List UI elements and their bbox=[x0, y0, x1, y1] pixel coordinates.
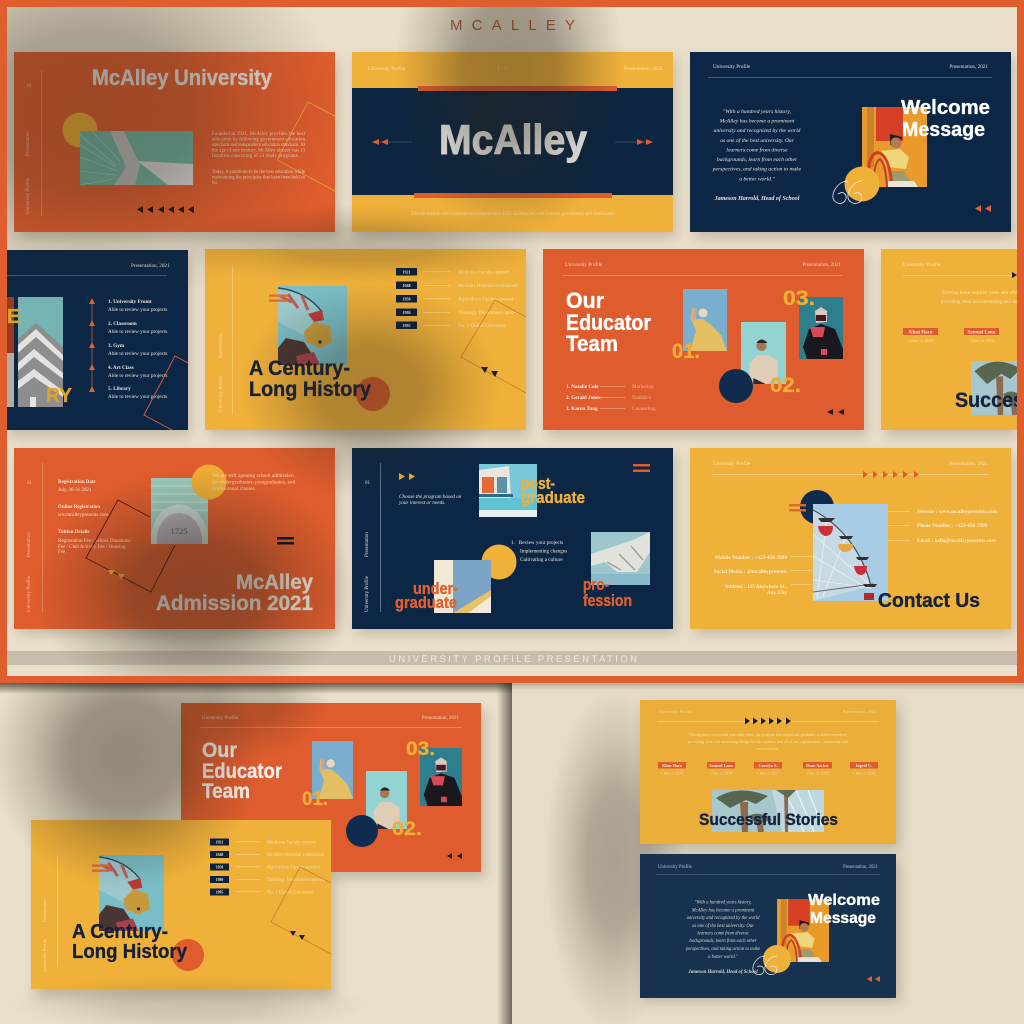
name tags: Ingrid C. bbox=[856, 763, 872, 768]
name tags bbox=[903, 328, 999, 343]
heading: Team bbox=[202, 780, 250, 803]
outline shape bbox=[271, 867, 331, 954]
list: 1. University Fromt bbox=[108, 299, 152, 305]
sidebar text: Presentation bbox=[365, 532, 370, 557]
contact details left: Mobile Number : +123-456-7899 bbox=[715, 555, 787, 561]
list: 5. Library bbox=[108, 386, 131, 392]
timeline dates: 1921 bbox=[216, 840, 223, 844]
list: Able to review your projects bbox=[108, 394, 167, 400]
contact details left: Address : 123 Anywhere St., bbox=[725, 584, 788, 590]
slide: Successful Stories (cut) bbox=[881, 249, 1024, 430]
details: July, 26-31 2021 bbox=[58, 488, 92, 493]
profession bbox=[583, 575, 632, 610]
numbers: 01. bbox=[672, 340, 700, 363]
timeline dates: McAlley Hospital established bbox=[458, 284, 518, 289]
paragraph: standards and independent education standards. At bbox=[212, 143, 306, 148]
arrows right bbox=[615, 139, 653, 145]
details: Online Registration bbox=[58, 505, 100, 510]
quote: learners come from diverse bbox=[726, 146, 788, 154]
list: 4. Art Class bbox=[108, 365, 134, 371]
heading: McAlley bbox=[439, 116, 588, 163]
team list: Statistics bbox=[632, 395, 651, 401]
quote: a better world." bbox=[739, 176, 775, 182]
timeline dates: Theology Department opened bbox=[267, 878, 325, 883]
heading: Welcome bbox=[808, 892, 880, 909]
heading bbox=[249, 357, 371, 401]
header bbox=[659, 709, 878, 715]
intro text: your interest or needs. bbox=[398, 500, 446, 506]
timeline dates: 1980 bbox=[402, 310, 410, 315]
contact details right: Website : www.mcalleypresents.com bbox=[917, 509, 998, 515]
card shadows bbox=[35, 710, 485, 997]
bars bbox=[92, 864, 110, 872]
slide: A Century-Long History copy bbox=[31, 820, 331, 989]
sidebar text: 01 bbox=[27, 84, 32, 89]
timeline dates: Agriculture Faculty opened bbox=[267, 866, 320, 870]
photo: man on chair bbox=[777, 899, 829, 962]
slide: Welcome Message copy bbox=[640, 854, 896, 998]
text bbox=[941, 291, 1024, 305]
header: Presentation, 2021 bbox=[843, 865, 879, 870]
name tags: Khaz Haro bbox=[909, 330, 933, 336]
timeline dates: 1980 bbox=[216, 878, 223, 882]
sidebar text bbox=[219, 333, 224, 412]
sidebar text: University Profile bbox=[219, 375, 224, 412]
header: Presentation, 2021 bbox=[131, 263, 170, 269]
header: Presentation, 2021 bbox=[949, 64, 988, 70]
slide: McAlley Admission 2021 bbox=[14, 448, 335, 629]
name tags: Class of 2015 bbox=[661, 770, 683, 776]
strip caption: UNIVERSITY PROFILE PRESENTATION bbox=[389, 654, 637, 665]
profession: fession bbox=[583, 591, 632, 610]
paragraph: the age of one century, McAlley already has 13 bbox=[212, 148, 306, 154]
timeline dates: No. 1 Global University bbox=[267, 890, 314, 896]
timeline bbox=[89, 298, 95, 392]
post-graduate: post- bbox=[521, 474, 555, 493]
slide: facilities (cut) bbox=[7, 250, 188, 430]
list: Implementing changes bbox=[520, 548, 567, 554]
sidebar text bbox=[42, 899, 47, 972]
heading bbox=[901, 97, 990, 141]
quote marks bbox=[753, 956, 777, 975]
quote: university and recognized by the world bbox=[687, 916, 760, 921]
numbers bbox=[672, 287, 815, 397]
equal bars bbox=[277, 537, 294, 544]
arrows bbox=[867, 976, 880, 982]
quote: university and recognized by the world bbox=[714, 128, 801, 134]
photo stack bbox=[7, 297, 63, 407]
paragraph: education by following government education bbox=[212, 138, 306, 142]
top title: MCALLEY bbox=[450, 17, 575, 34]
team list bbox=[566, 384, 656, 412]
team list: Marketing bbox=[632, 384, 654, 390]
team list: 1. Natalie Cole bbox=[566, 384, 599, 390]
quote: Jameson Harrold, Head of School bbox=[714, 196, 800, 202]
timeline dates: 1921 bbox=[402, 270, 410, 274]
timeline dates bbox=[396, 268, 518, 329]
slide: programs bbox=[352, 448, 673, 629]
panel: lower right bbox=[512, 683, 1024, 1024]
arrows bbox=[745, 718, 791, 724]
details: ww.mcalleypresents.com bbox=[58, 513, 108, 518]
name tags: Class of 2017 bbox=[757, 770, 779, 776]
intro text: Driving these successful years into effect, the program has shaped our graduates to lead everywhere bbox=[689, 732, 847, 738]
timeline dates: McAlley Hospital established bbox=[267, 853, 325, 858]
header: Presentation, 2021 bbox=[949, 461, 988, 467]
quote: Jameson Harrold, Head of School bbox=[687, 970, 758, 975]
name tags bbox=[658, 762, 878, 776]
quote: backgrounds, learn from each other bbox=[717, 156, 798, 163]
heading bbox=[72, 921, 188, 963]
heading: Long History bbox=[72, 941, 188, 963]
heading: A Century- bbox=[249, 357, 350, 380]
heading: McAlley University bbox=[92, 65, 273, 90]
sidebar text: University Profile bbox=[42, 939, 47, 972]
list: Able to review your projects bbox=[108, 351, 167, 357]
numbers: 02. bbox=[770, 374, 801, 397]
quote: perspectives, and taking action to make bbox=[712, 166, 802, 172]
photo: wheel bbox=[99, 855, 164, 931]
circle bbox=[346, 815, 378, 847]
circle bbox=[482, 544, 516, 580]
slide: Contact Us bbox=[690, 448, 1011, 629]
connectors bbox=[790, 511, 910, 585]
header: University Profile bbox=[565, 261, 603, 268]
outline shape bbox=[144, 356, 188, 430]
header: University Profile bbox=[903, 261, 941, 268]
outline shape bbox=[461, 300, 526, 393]
heading bbox=[156, 571, 313, 615]
sidebar text: Presentation bbox=[219, 333, 224, 358]
heading: McAlley bbox=[236, 571, 313, 594]
quote: "With a hundred years history, bbox=[723, 109, 792, 115]
list: Able to review your projects bbox=[108, 373, 167, 379]
sidebar text: University Profile bbox=[27, 575, 32, 612]
intro text bbox=[398, 494, 462, 506]
sidebar text: Presentation bbox=[26, 131, 31, 156]
timeline dates: 1958 bbox=[402, 296, 410, 302]
under-graduate: graduate bbox=[395, 593, 457, 612]
team list: Counseling bbox=[632, 406, 656, 412]
subtitle: Educate students who contribute and progress since 1921. Building ties with business, government, and beneficiaries bbox=[411, 212, 615, 217]
outline shape bbox=[277, 102, 335, 191]
heading: Successful Stories bbox=[699, 811, 838, 829]
sidebar text: Presentation bbox=[27, 532, 32, 557]
contact details right: Email : hello@mcalleypresents.com bbox=[917, 538, 997, 544]
slide: Successful Stories bbox=[640, 700, 896, 844]
arrows bbox=[481, 367, 498, 377]
timeline dates: Medicine Faculty opened bbox=[458, 270, 509, 276]
quote: McAlley has become a prominent bbox=[691, 908, 755, 914]
circle bbox=[356, 377, 390, 411]
card shadows bbox=[7, 58, 1017, 634]
timeline dates: No. 1 Global University bbox=[458, 324, 507, 329]
timeline dates: 1958 bbox=[216, 866, 223, 870]
circle bbox=[172, 939, 204, 971]
header text bbox=[368, 66, 662, 71]
heading: Long History bbox=[249, 378, 371, 401]
vertical rule bbox=[41, 70, 42, 216]
yellow letters bbox=[7, 306, 73, 407]
details bbox=[58, 480, 131, 555]
header: Presentation, 2021 bbox=[843, 709, 878, 715]
paragraph: Founded in 1921, McAlley provides the best bbox=[212, 132, 306, 137]
list: 3. Gym bbox=[108, 343, 125, 349]
arrows bbox=[975, 205, 991, 212]
header bbox=[565, 261, 841, 268]
photo: arch bbox=[151, 478, 208, 544]
arrows bbox=[137, 206, 194, 213]
post-graduate: graduate bbox=[521, 488, 585, 507]
timeline dates: Medicine Faculty opened bbox=[267, 840, 316, 846]
bars bbox=[789, 504, 806, 512]
slide: A Century-Long History bbox=[205, 249, 526, 430]
numbers: 02. bbox=[392, 819, 422, 840]
paragraph: We are still opening school admission bbox=[212, 473, 294, 479]
quote: a better world." bbox=[708, 955, 738, 960]
photo: beach house bbox=[479, 464, 537, 517]
panel: lower left bbox=[0, 620, 512, 1024]
slide: McAlley University bbox=[14, 52, 335, 232]
quote: as one of the best university. Our bbox=[692, 924, 754, 929]
details: Fee / Club Activity Fee / Housing bbox=[58, 545, 126, 550]
sidebar text: 01 bbox=[365, 481, 370, 486]
paragraph: far. bbox=[212, 181, 218, 186]
card shadows bbox=[644, 705, 900, 1002]
top cast shadow bbox=[512, 683, 1024, 690]
heading: Message bbox=[902, 119, 985, 141]
shading overlay bbox=[0, 620, 370, 1024]
quote: perspectives, and taking action to make bbox=[685, 947, 760, 952]
intro text bbox=[688, 732, 849, 751]
details: Tuition Details bbox=[58, 530, 89, 535]
header: Presentation, 2021 bbox=[802, 262, 841, 268]
sidebar text: 01 bbox=[27, 481, 32, 486]
name tags: Class of 2016 bbox=[969, 338, 995, 343]
sidebar text: Presentation bbox=[42, 899, 47, 922]
arrows bbox=[827, 409, 844, 415]
arrows bbox=[399, 473, 415, 480]
sidebar text bbox=[365, 481, 370, 612]
quote bbox=[685, 900, 760, 975]
numbers: 03. bbox=[406, 739, 435, 760]
list bbox=[511, 540, 567, 563]
slide: Our Educator Team bbox=[543, 249, 864, 430]
name tags: Class of 2015 bbox=[908, 338, 934, 343]
bars bbox=[633, 464, 650, 472]
details: Registration Fee / School Donations bbox=[58, 539, 131, 544]
name tags: Class of 2019 bbox=[853, 770, 875, 776]
details: Registration Date bbox=[58, 480, 96, 485]
quote: learners come from diverse bbox=[697, 932, 749, 936]
timeline dates: 1948 bbox=[402, 283, 410, 288]
bottom strip bbox=[7, 651, 1017, 665]
slide: Welcome Message bbox=[690, 52, 1011, 232]
paragraph: for undergraduates, postgraduates, and bbox=[212, 478, 296, 486]
yellow letters: E bbox=[7, 306, 20, 328]
contact details right: Phone Number : +123-456-7899 bbox=[917, 523, 988, 529]
name tags: Carolyn S. bbox=[758, 763, 778, 768]
paragraph: maintaining the principles that have been held so bbox=[212, 176, 306, 180]
contact details left: Any City bbox=[767, 590, 787, 596]
frame bbox=[0, 0, 1024, 683]
timeline dates: 1948 bbox=[216, 853, 223, 857]
slide: McAlley cover bbox=[352, 52, 673, 232]
photo: building bbox=[434, 560, 491, 613]
heading: Educator bbox=[202, 760, 282, 783]
name tags: Dean Archer bbox=[806, 763, 829, 768]
shading overlay bbox=[0, 0, 625, 710]
circle bbox=[62, 112, 98, 148]
timeline dates: Theology Department opened bbox=[458, 311, 518, 316]
photo: palm bbox=[971, 361, 1024, 415]
header text: University Profile bbox=[368, 65, 406, 72]
list bbox=[108, 299, 167, 400]
circle bbox=[800, 490, 834, 524]
circle bbox=[719, 369, 753, 403]
arrows bbox=[290, 931, 305, 940]
circle bbox=[844, 166, 880, 202]
header text: Presentation, 2021 bbox=[624, 66, 663, 72]
timeline dates bbox=[210, 838, 325, 896]
slide: Our Educator Team copy bbox=[181, 703, 481, 872]
numbers bbox=[302, 739, 435, 840]
yellow letters: RY bbox=[46, 385, 73, 407]
header bbox=[713, 460, 988, 467]
heading bbox=[202, 739, 282, 803]
panel: top frame content bbox=[0, 0, 1024, 710]
heading bbox=[808, 892, 880, 927]
contact details right bbox=[917, 509, 998, 544]
header bbox=[202, 716, 459, 721]
header: University Profile bbox=[202, 716, 239, 721]
photos bbox=[312, 741, 462, 829]
quote: "With a hundred years history, bbox=[694, 900, 752, 906]
intro text: providing clear and interesting design for the students and all of our organization, community and bbox=[688, 739, 849, 745]
heading: Educator bbox=[566, 310, 651, 335]
arrows bbox=[447, 853, 462, 859]
photo: palm bbox=[712, 790, 824, 832]
name tags: Class of 2018 bbox=[806, 770, 828, 776]
contact details left bbox=[714, 555, 788, 596]
header: University Profile bbox=[713, 63, 751, 70]
header bbox=[658, 865, 879, 870]
list: 2. Classroom bbox=[108, 321, 137, 327]
name tags: Samuel Leon bbox=[709, 763, 733, 768]
numbers: 01. bbox=[302, 789, 328, 810]
under-graduate: under- bbox=[413, 579, 458, 598]
heading: Our bbox=[202, 739, 237, 762]
quote bbox=[712, 109, 802, 202]
circle bbox=[192, 464, 226, 500]
name tags: Class of 2016 bbox=[710, 770, 732, 776]
list: 1. Review your projects bbox=[511, 540, 563, 546]
circle bbox=[763, 945, 791, 973]
team list: 2. Gerald Jones bbox=[566, 395, 600, 401]
photo: ferris wheel bbox=[813, 504, 888, 601]
heading: Contact Us bbox=[878, 590, 980, 612]
header: Presentation, 2021 bbox=[422, 716, 459, 721]
name tags: Samuel Leon bbox=[968, 330, 996, 336]
orange bars bbox=[414, 86, 617, 198]
frame cast shadow bbox=[0, 683, 512, 1024]
header: University Profile bbox=[659, 709, 692, 714]
photo: bridge bbox=[80, 131, 193, 185]
arrows left bbox=[372, 139, 412, 145]
heading: Our bbox=[566, 288, 604, 313]
post-graduate bbox=[521, 474, 585, 507]
photo: wheel bbox=[278, 286, 347, 365]
arrows bbox=[108, 570, 125, 579]
intro text: environment. bbox=[757, 746, 779, 751]
paragraph bbox=[212, 473, 296, 492]
paragraph: faculties consisting of 53 study programs. bbox=[212, 154, 299, 159]
header: University Profile bbox=[658, 865, 692, 870]
name tags: Khaz Haro bbox=[662, 763, 682, 768]
timeline dates: 1995 bbox=[216, 890, 223, 894]
header text: 1 / 21 bbox=[497, 66, 509, 72]
quote: McAlley has become a prominent bbox=[719, 118, 795, 124]
under-graduate bbox=[395, 579, 458, 612]
list: Cultivating a culture bbox=[520, 557, 563, 563]
list: Able to review your projects bbox=[108, 307, 167, 313]
paragraph: Today, it continues to be the best education while bbox=[212, 170, 305, 175]
list: Able to review your projects bbox=[108, 329, 167, 335]
profession: pro- bbox=[583, 575, 609, 594]
outline shape bbox=[86, 500, 175, 592]
header bbox=[713, 64, 988, 69]
paragraph: professional classes. bbox=[212, 485, 256, 492]
sidebar text: University Profile bbox=[365, 575, 370, 612]
heading: Message bbox=[810, 910, 876, 927]
quote marks bbox=[833, 181, 862, 203]
intro text: Choose the program based on bbox=[399, 494, 462, 500]
heading: Admission 2021 bbox=[156, 592, 313, 615]
details: Fee bbox=[58, 550, 66, 555]
quote: backgrounds, learn from each other bbox=[689, 939, 757, 944]
heading: A Century- bbox=[72, 921, 168, 943]
sidebar text: University Profile bbox=[26, 177, 31, 214]
contact details left: Social Media : @mcalleypresents bbox=[714, 569, 787, 575]
paragraph bbox=[212, 132, 306, 186]
timeline dates: 1995 bbox=[402, 323, 410, 328]
team list: 3. Karen Tung bbox=[566, 406, 598, 412]
heading: Welcome bbox=[901, 97, 990, 119]
sidebar text bbox=[26, 84, 32, 214]
bars bbox=[269, 294, 288, 302]
heading: Team bbox=[566, 331, 618, 356]
quote: as one of the best university. Our bbox=[720, 137, 795, 144]
heading bbox=[566, 288, 651, 356]
shading bbox=[545, 690, 685, 1024]
photo: man on chair bbox=[862, 107, 927, 187]
sidebar text bbox=[27, 481, 32, 612]
timeline dates: Agriculture Faculty opened bbox=[458, 298, 513, 302]
numbers: 03. bbox=[783, 287, 815, 310]
arrows bbox=[863, 471, 919, 478]
header: University Profile bbox=[713, 460, 751, 467]
photos bbox=[683, 289, 843, 384]
photo: architecture bbox=[591, 532, 650, 585]
